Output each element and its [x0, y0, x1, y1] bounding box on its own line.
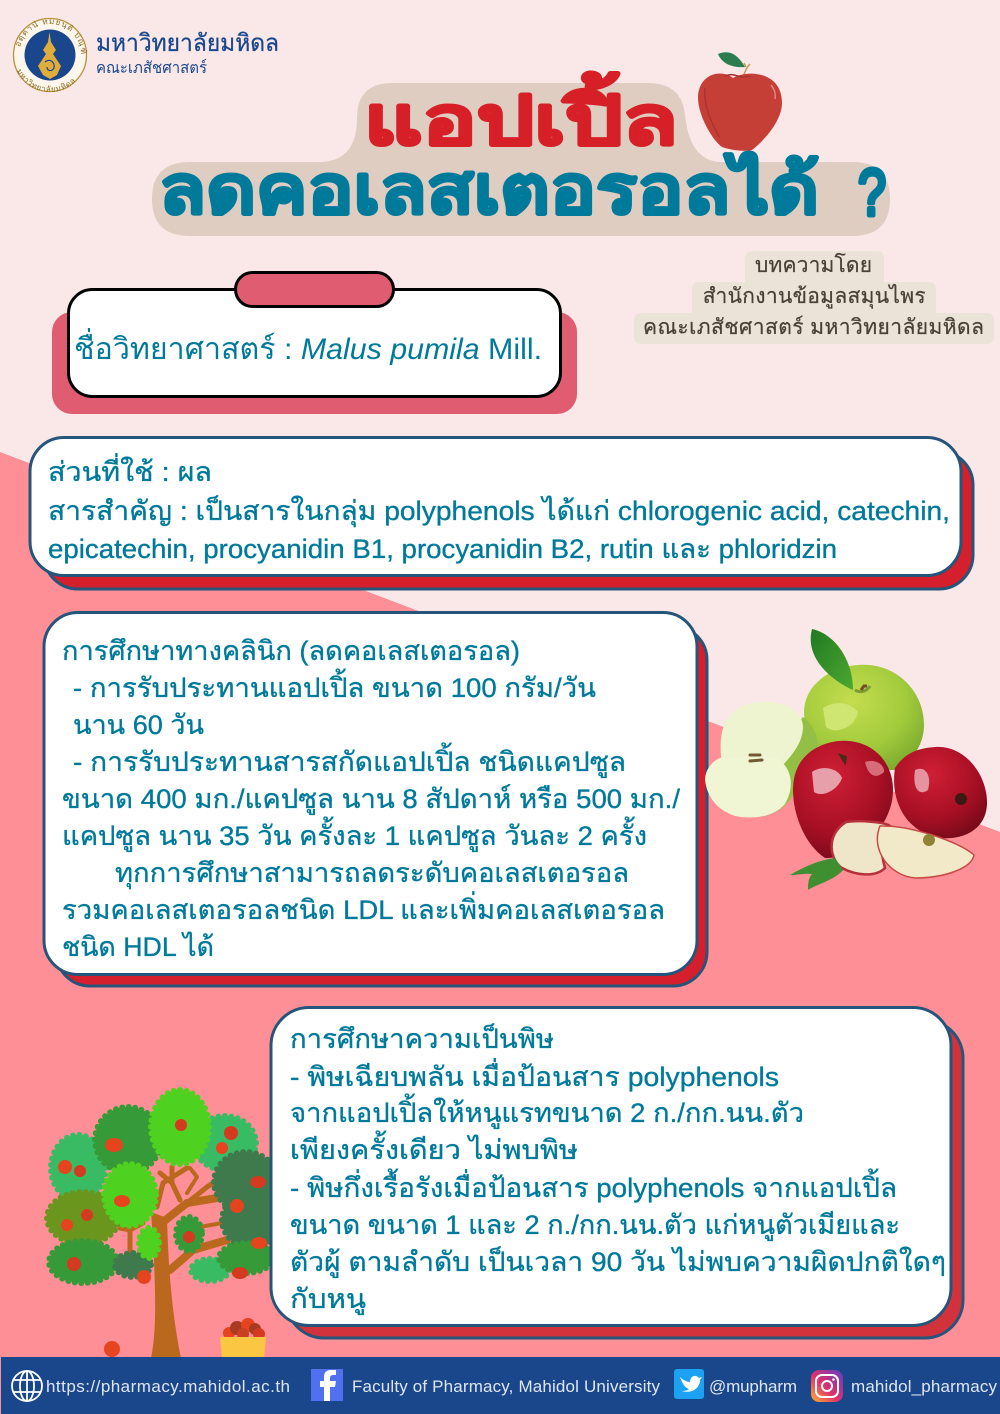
icon: facebook — [311, 1369, 343, 1401]
icon: globe — [12, 1371, 42, 1401]
author credit: คณะเภสัชศาสตร์ มหาวิทยาลัยมหิดล — [643, 315, 985, 339]
panel: part used and key compounds: ส่วนที่ใช้ : ผล — [48, 453, 212, 487]
panel: toxicity studies: - พิษเฉียบพลัน เมื่อป้อนสาร polyphenols — [290, 1058, 779, 1092]
green leaf — [811, 629, 853, 690]
panel: clinical studies: การศึกษาทางคลินิก (ลดคอเลสเตอรอล) — [62, 636, 520, 666]
icon: twitter — [674, 1369, 704, 1399]
green apple — [804, 665, 924, 770]
logo: Mahidol University seal: มหาวิทยาลัยมหิดล — [17, 69, 76, 92]
panel: toxicity studies: ตัวผู้ ตามลำดับ เป็นเวลา 90 วัน ไม่พบความผิดปกติใดๆ — [290, 1244, 946, 1278]
tree foliage — [47, 1090, 282, 1283]
red apple back — [894, 747, 987, 838]
panel: clinical studies: ขนาด 400 มก./แคปซูล นาน 8 สัปดาห์ หรือ 500 มก./ — [62, 783, 680, 815]
panel: clinical studies: นาน 60 วัน — [73, 710, 204, 740]
panel: toxicity studies: ขนาด ขนาด 1 และ 2 ก./กก.นน.ตัว แก่หนูตัวเมียและ — [290, 1210, 900, 1241]
illustration: group of apples — [705, 629, 987, 890]
panel: toxicity studies: - พิษกึ่งเรื้อรังเมื่อป้อนสาร polyphenols จากแอปเปิ้ล — [290, 1168, 897, 1203]
panel: toxicity studies: จากแอปเปิ้ลให้หนูแรทขนาด 2 ก./กก.นน.ตัว — [290, 1093, 804, 1129]
panel: clinical studies: - การรับประทานแอปเปิ้ล ขนาด 100 กรัม/วัน — [73, 668, 596, 703]
title line 1: แอปเปิ้ล — [364, 73, 678, 159]
tree apples — [58, 1119, 267, 1357]
panel: toxicity studies: กับหนู — [290, 1284, 366, 1315]
website: https://pharmacy.mahidol.ac.th — [46, 1377, 290, 1396]
panel: part used and key compounds: สารสำคัญ : เป็นสารในกลุ่ม polyphenols ได้แก่ chlorogenic acid, catechin, — [48, 493, 950, 528]
illustration: apple tree — [47, 1090, 282, 1358]
small leaves — [790, 858, 843, 890]
footer bar — [1, 1357, 1000, 1414]
university name: มหาวิทยาลัยมหิดล — [96, 30, 279, 57]
title question mark: ? — [858, 155, 886, 229]
icon: red apple — [698, 52, 782, 151]
instagram handle: mahidol_pharmacy — [851, 1377, 998, 1396]
panel: scientific name — [52, 272, 577, 414]
panel: toxicity studies — [271, 1008, 963, 1338]
twitter handle: @mupharm — [709, 1377, 797, 1396]
icon: instagram — [811, 1370, 843, 1402]
panel: clinical studies: ทุกการศึกษาสามารถลดระดับคอเลสเตอรอล — [115, 858, 629, 890]
red apple front — [793, 741, 893, 858]
basket of apples — [220, 1318, 266, 1358]
panel: clinical studies: แคปซูล นาน 35 วัน ครั้งละ 1 แคปซูล วันละ 2 ครั้ง — [62, 816, 647, 852]
panel: clinical studies: รวมคอเลสเตอรอลชนิด LDL และเพิ่มคอเลสเตอรอล — [62, 891, 665, 925]
panel: part used and key compounds: epicatechin, procyanidin B1, procyanidin B2, rutin และ phloridzin — [48, 534, 837, 564]
logo: Mahidol University seal — [12, 18, 88, 92]
apple slices — [832, 821, 974, 878]
title background shape — [152, 83, 890, 236]
panel: clinical studies: - การรับประทานสารสกัดแอปเปิ้ล ชนิดแคปซูล — [73, 742, 626, 778]
panel: scientific name: ชื่อวิทยาศาสตร์ : Malus pumila Mill. — [74, 328, 542, 366]
author credit: บทความโดย — [755, 253, 873, 277]
facebook name: Faculty of Pharmacy, Mahidol University — [352, 1377, 660, 1396]
panel: clinical studies — [44, 612, 707, 986]
tree trunk and branches — [120, 1167, 227, 1358]
faculty name: คณะเภสัชศาสตร์ — [96, 58, 207, 77]
title line 2: ลดคอเลสเตอรอลได้ — [159, 152, 819, 228]
panel: part used and key compounds — [30, 438, 973, 589]
half green apple — [705, 702, 818, 818]
author credit: สำนักงานข้อมูลสมุนไพร — [703, 284, 927, 309]
author credit — [634, 251, 994, 344]
panel: toxicity studies: การศึกษาความเป็นพิษ — [290, 1021, 554, 1054]
panel: toxicity studies: เพียงครั้งเดียว ไม่พบพิษ — [290, 1130, 578, 1165]
panel: clinical studies: ชนิด HDL ได้ — [62, 932, 214, 962]
